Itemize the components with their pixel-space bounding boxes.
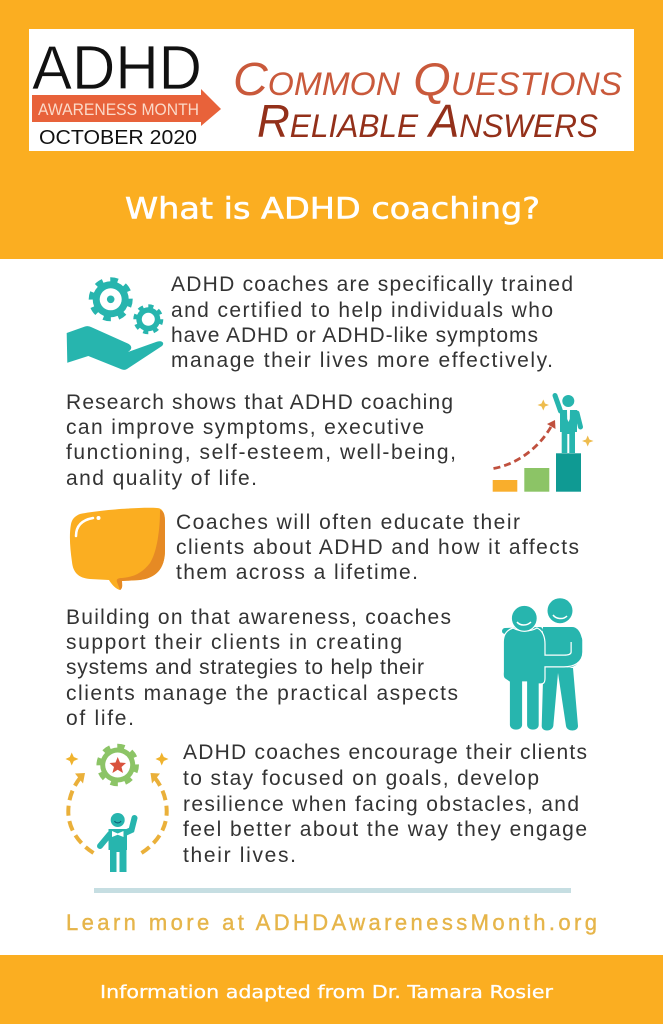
- logo: ADHD Awareness Month: AWARENESS MONTH: [38, 100, 199, 119]
- icon: person and goal cycle: [66, 746, 168, 872]
- text: paragraph 5: feel better about the way they engage: [183, 818, 587, 841]
- banner: [29, 29, 634, 151]
- text: paragraph 4: systems and strategies to help their: [66, 656, 424, 679]
- footer band: [0, 955, 663, 1024]
- text: paragraph 4: of life.: [66, 707, 134, 730]
- text: paragraph 3: them across a lifetime.: [176, 561, 418, 584]
- text: paragraph 3: clients about ADHD and how it affects: [176, 536, 579, 559]
- footer credit: Information adapted from Dr. Tamara Rosier: [100, 982, 554, 1003]
- text: paragraph 4: Building on that awareness, coaches: [66, 606, 451, 629]
- text: paragraph 3: Coaches will often educate their: [176, 511, 520, 534]
- text: paragraph 2: functioning, self-esteem, well-being,: [66, 441, 456, 464]
- text: paragraph 5: to stay focused on goals, develop: [183, 767, 539, 790]
- logo: ADHD Awareness Month: [32, 34, 221, 149]
- text: paragraph 4: support their clients in creating: [66, 631, 402, 654]
- text: paragraph 5: their lives.: [183, 844, 296, 867]
- logo: ADHD Awareness Month: OCTOBER 2020: [39, 126, 197, 149]
- text: paragraph 2: can improve symptoms, executive: [66, 416, 424, 439]
- text: paragraph 4: clients manage the practical aspects: [66, 682, 458, 705]
- text: paragraph 5: ADHD coaches encourage their clients: [183, 741, 587, 764]
- text: paragraph 3: [176, 511, 579, 584]
- text: paragraph 1: manage their lives more effectively.: [171, 349, 553, 372]
- text: paragraph 2: [66, 391, 456, 490]
- icon: two people embracing: [503, 598, 582, 730]
- call to action: website: Learn more at ADHDAwarenessMonth.org: [66, 910, 597, 935]
- heading: Reliable Answers: Reliable Answers: [257, 95, 598, 147]
- text: paragraph 5: resilience when facing obstacles, and: [183, 793, 579, 816]
- icon: growth chart with person: [493, 395, 594, 492]
- icon: speech bubble: [70, 508, 165, 590]
- text: paragraph 1: and certified to help individuals who: [171, 299, 553, 322]
- text: paragraph 1: [171, 273, 573, 372]
- text: paragraph 1: have ADHD or ADHD-like symptoms: [171, 324, 538, 347]
- text: paragraph 4: [66, 606, 458, 730]
- text: paragraph 2: and quality of life.: [66, 467, 257, 490]
- text: paragraph 5: [183, 741, 587, 867]
- text: paragraph 1: ADHD coaches are specifically trained: [171, 273, 573, 296]
- icon: hand with gears: [67, 280, 163, 370]
- header band: [0, 0, 663, 259]
- title: What is ADHD coaching?: [125, 192, 540, 226]
- heading: Common Questions: Common Questions: [233, 53, 622, 105]
- logo: ADHD Awareness Month: ADHD: [32, 34, 202, 103]
- text: paragraph 2: Research shows that ADHD coaching: [66, 391, 453, 414]
